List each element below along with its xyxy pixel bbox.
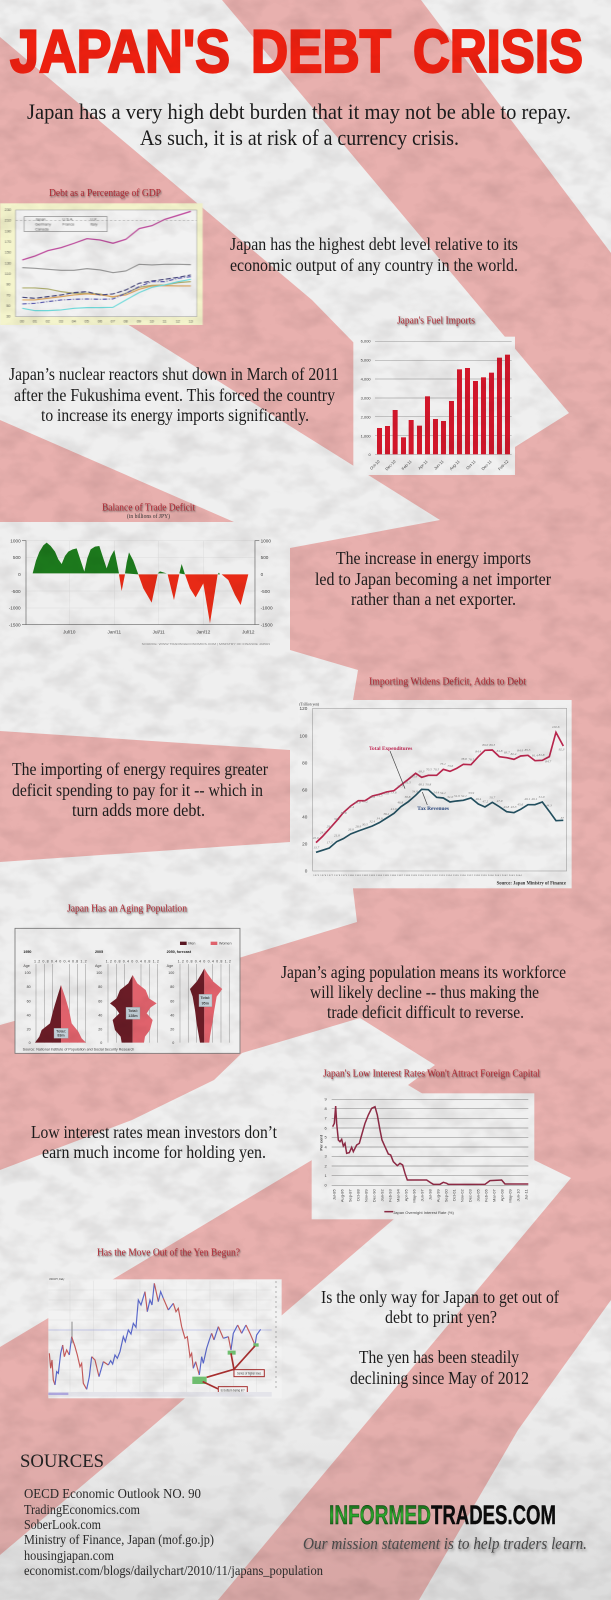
chart: expenditures vs tax revenues: 44.3 bbox=[546, 804, 552, 808]
chart: population pyramids: 1950 bbox=[23, 950, 31, 954]
chart: expenditures vs tax revenues: 51.0 bbox=[539, 795, 545, 799]
chart: balance of trade: SOURCE: WWW.TRADINGECONOMICS.COM | MINISTRY OF FINANCE JAPAN bbox=[142, 642, 270, 646]
chart: debt as percentage of GDP bbox=[0, 203, 203, 325]
chart: expenditures vs tax revenues: 1975 1976 1977 1978 1979 1980 1981 1982 1983 1984 1985 1986 1987 1988 1989 1990 1991 1992 1993 1994 1995 1996 1997 1998 1999 2000 2001 2002 2003 2004 bbox=[313, 875, 523, 877]
chart: interest rate line: Nov-02 bbox=[459, 1189, 464, 1202]
chart: expenditures vs tax revenues: 46.9 bbox=[355, 800, 361, 804]
chart: expenditures vs tax revenues: 40 bbox=[302, 815, 308, 820]
chart: expenditures vs tax revenues: 29.1 bbox=[327, 824, 333, 828]
text: nuclear reactors: Japan’s nuclear reactors shut down in March of 2011 bbox=[9, 364, 339, 384]
chart: expenditures vs tax revenues: 43.4 bbox=[348, 805, 354, 809]
chart: fuel imports bars: 2,000 bbox=[361, 414, 371, 419]
heading: fuel imports: Japan's Fuel Imports bbox=[397, 316, 475, 326]
chart: expenditures vs tax revenues: 84.4 bbox=[475, 749, 481, 753]
chart: population pyramids: 1.2 0.8 0.4 0 0.4 0.8 1.2 bbox=[106, 959, 159, 963]
text: print yen question: Is the only way for Japan to get out of bbox=[321, 1287, 559, 1307]
title bbox=[10, 18, 583, 85]
chart: population pyramids: 80 bbox=[170, 985, 174, 989]
chart: expenditures vs tax revenues: 50.8 bbox=[405, 795, 411, 799]
chart: population pyramids: 1.2 0.8 0.4 0 0.4 0.8 1.2 bbox=[178, 959, 231, 963]
sources list: TradingEconomics.com bbox=[24, 1502, 140, 1517]
heading: importing widens deficit: Importing Widens Deficit, Adds to Debt bbox=[369, 676, 526, 688]
intro text: As such, it is at risk of a currency crisis. bbox=[140, 125, 459, 150]
chart: expenditures vs tax revenues: 51.9 bbox=[454, 794, 460, 798]
chart: interest rate line: Jun-97 bbox=[419, 1189, 424, 1202]
chart: population pyramids: Total: bbox=[56, 1029, 66, 1033]
chart: balance of trade bbox=[9, 538, 273, 646]
chart: debt as percentage of GDP: 00 bbox=[20, 320, 24, 323]
chart: expenditures vs tax revenues: 20 bbox=[302, 842, 308, 847]
heading: debt as percentage of GDP: Debt as a Percentage of GDP bbox=[49, 188, 161, 199]
chart: expenditures vs tax revenues: 47.2 bbox=[482, 800, 488, 804]
chart: debt as percentage of GDP: 210 bbox=[5, 219, 11, 223]
chart: population pyramids: Age bbox=[95, 964, 102, 968]
chart: expenditures vs tax revenues: 47.9 bbox=[497, 799, 503, 803]
text: highest debt level: economic output of any country in the world. bbox=[230, 255, 518, 275]
chart: balance of trade: -1500 bbox=[9, 622, 21, 627]
chart: population pyramids: 60 bbox=[98, 999, 102, 1003]
logo: informedtrades.com bbox=[329, 1500, 556, 1530]
chart: expenditures vs tax revenues: 70.5 bbox=[426, 768, 432, 772]
text: nuclear reactors: after the Fukushima event. This forced the country bbox=[14, 385, 335, 405]
chart: expenditures vs tax revenues: 54.4 bbox=[433, 790, 439, 794]
tagline: Our mission statement is to help traders learn. bbox=[303, 1534, 587, 1553]
chart: yen price chart: Is bottom being in? bbox=[221, 1388, 245, 1392]
chart: population pyramids: 0 bbox=[100, 1041, 102, 1045]
chart: population pyramids: 100 bbox=[25, 971, 31, 975]
chart: expenditures vs tax revenues: 49.1 bbox=[524, 797, 530, 801]
heading: low interest rates: Japan's Low Interest Rates Won't Attract Foreign Capital bbox=[323, 1068, 540, 1080]
chart: interest rate line: May-96 bbox=[411, 1189, 416, 1203]
chart: balance of trade: 1000 bbox=[10, 538, 21, 543]
chart: expenditures vs tax revenues: 47.2 bbox=[362, 799, 368, 803]
chart: interest rate line: 6 bbox=[324, 1125, 327, 1130]
text: print yen question: debt to print yen? bbox=[385, 1307, 497, 1327]
chart: expenditures vs tax revenues: 92.3 bbox=[559, 748, 565, 752]
chart: balance of trade: -500 bbox=[261, 589, 270, 594]
chart: expenditures vs tax revenues: 70.5 bbox=[433, 768, 439, 772]
chart: population pyramids: 2005 bbox=[95, 950, 103, 954]
chart: population pyramids: 0 bbox=[29, 1041, 31, 1045]
chart: yen price chart: USDJPY, Daily bbox=[49, 1279, 65, 1281]
chart: interest rate line: 5 bbox=[324, 1135, 327, 1140]
text: increase in energy imports: led to Japan becoming a net importer bbox=[315, 569, 551, 589]
chart: interest rate line: 3 bbox=[324, 1154, 327, 1159]
chart: population pyramids: 40 bbox=[170, 1013, 174, 1017]
chart: population pyramids: Men bbox=[188, 942, 195, 946]
chart: expenditures vs tax revenues: 89.3 bbox=[489, 743, 495, 747]
chart: fuel imports bars: Oct-11 bbox=[465, 458, 477, 471]
sources list: housingjapan.com bbox=[24, 1548, 114, 1563]
chart: debt as percentage of GDP: 02 bbox=[46, 320, 50, 323]
text: increase in energy imports: rather than a net exporter. bbox=[351, 589, 516, 609]
chart: debt as percentage of GDP: 12 bbox=[176, 320, 180, 323]
chart: population pyramids: Age bbox=[167, 964, 173, 968]
chart: debt as percentage of GDP: 01 bbox=[33, 320, 37, 323]
sources list bbox=[24, 1486, 323, 1578]
chart: debt as percentage of GDP: 30 bbox=[6, 315, 11, 318]
chart: expenditures vs tax revenues: 43.3 bbox=[511, 805, 517, 809]
chart: interest rate line: May-09 bbox=[507, 1189, 512, 1203]
chart: expenditures vs tax revenues: 28.9 bbox=[355, 824, 361, 828]
chart: debt as percentage of GDP: 03 bbox=[59, 320, 63, 323]
chart: balance of trade: 500 bbox=[261, 555, 269, 560]
chart: debt as percentage of GDP: 06 bbox=[98, 320, 102, 323]
text: aging population: Japan’s aging population means its workforce bbox=[281, 962, 566, 982]
title: JAPAN'S bbox=[10, 18, 230, 85]
sources list: Ministry of Finance, Japan (mof.go.jp) bbox=[24, 1532, 214, 1547]
chart: population pyramids: 100 bbox=[168, 971, 174, 975]
heading: move out of the yen: Has the Move Out of the Yen Begun? bbox=[97, 1248, 240, 1258]
chart: debt as percentage of GDP: U.S.A. bbox=[62, 218, 74, 221]
chart: interest rate line: Jul-85 bbox=[331, 1189, 336, 1200]
text: nuclear reactors: to increase its energy imports significantly. bbox=[41, 405, 309, 425]
chart: expenditures vs tax revenues: 50.6 bbox=[369, 795, 375, 799]
chart: fuel imports bars: Oct-10 bbox=[369, 458, 381, 471]
chart: fuel imports bars: 4,000 bbox=[361, 377, 371, 382]
chart: interest rate line: Sep-00 bbox=[443, 1189, 448, 1202]
chart: debt as percentage of GDP: 230 bbox=[5, 208, 11, 212]
text: print yen question: The yen has been steadily bbox=[359, 1347, 519, 1367]
chart: fuel imports bars: 1,000 bbox=[361, 433, 371, 438]
chart: expenditures vs tax revenues: 85.5 bbox=[525, 748, 531, 752]
chart: expenditures vs tax revenues: 54.9 bbox=[412, 790, 418, 794]
chart: expenditures vs tax revenues: 54.1 bbox=[440, 791, 446, 795]
chart: expenditures vs tax revenues: 45.6 bbox=[517, 803, 523, 807]
chart: debt as percentage of GDP: Italy bbox=[90, 223, 98, 226]
chart: balance of trade: -1000 bbox=[261, 606, 273, 611]
chart: interest rate line: Apr-08 bbox=[499, 1189, 504, 1201]
title: CRISIS bbox=[413, 18, 583, 85]
chart: debt as percentage of GDP: 09 bbox=[137, 320, 141, 323]
chart: expenditures vs tax revenues: 17.3 bbox=[327, 840, 333, 844]
chart: interest rate line: Dec-90 bbox=[371, 1189, 376, 1202]
heading: balance of trade deficit: Balance of Trade Deficit bbox=[102, 502, 195, 514]
heading: balance of trade deficit bbox=[102, 502, 195, 520]
chart: interest rate line: 0 bbox=[324, 1183, 327, 1188]
chart: expenditures vs tax revenues: 49.1 bbox=[531, 797, 537, 801]
chart: interest rate line: Aug-86 bbox=[339, 1189, 344, 1202]
chart: interest rate line: Aug-99 bbox=[435, 1189, 440, 1202]
chart: expenditures vs tax revenues: 30.5 bbox=[362, 822, 368, 826]
chart: interest rate line: 2 bbox=[324, 1163, 327, 1168]
chart: population pyramids: 20 bbox=[170, 1027, 174, 1031]
chart: interest rate line: Jan-92 bbox=[379, 1189, 384, 1202]
chart: balance of trade: 1000 bbox=[261, 538, 271, 543]
sources heading: SOURCES bbox=[20, 1451, 104, 1472]
chart: population pyramids: Total: bbox=[128, 1009, 138, 1013]
chart: expenditures vs tax revenues: 81.4 bbox=[532, 754, 538, 758]
chart: balance of trade: -1000 bbox=[9, 606, 21, 611]
chart: expenditures vs tax revenues: 60 bbox=[302, 788, 308, 793]
heading: aging population: Japan Has an Aging Population bbox=[67, 904, 188, 914]
logo: informedtrades.com: INFORMED bbox=[329, 1500, 431, 1530]
chart: expenditures vs tax revenues: 100 bbox=[300, 733, 308, 738]
chart: debt as percentage of GDP: 08 bbox=[124, 320, 128, 323]
chart: population pyramids: Women bbox=[219, 942, 232, 946]
sources list: OECD Economic Outlook NO. 90 bbox=[24, 1486, 201, 1501]
chart: expenditures vs tax revenues: Source: Japan Ministry of Finance bbox=[497, 882, 567, 887]
chart: expenditures vs tax revenues: 26.9 bbox=[348, 828, 354, 832]
chart: expenditures vs tax revenues: 84.9 bbox=[517, 748, 523, 752]
chart: population pyramids: 0 bbox=[172, 1041, 174, 1045]
chart: balance of trade: -500 bbox=[11, 589, 21, 594]
text: importing energy: deficit spending to pay for it -- which in bbox=[12, 780, 263, 800]
chart: population pyramids: Source: National Institute of Population and Social Security Research bbox=[23, 1048, 134, 1052]
chart: population pyramids: 40 bbox=[98, 1013, 102, 1017]
chart: expenditures vs tax revenues: (Trillion yen) bbox=[299, 703, 320, 707]
chart: fuel imports bars: Dec-10 bbox=[384, 458, 397, 471]
chart: population pyramids: 128m bbox=[128, 1014, 138, 1018]
chart: expenditures vs tax revenues: 34.9 bbox=[377, 816, 383, 820]
chart: interest rate line: Japan Overnight Interest Rate (%) bbox=[393, 1210, 454, 1215]
chart: expenditures vs tax revenues: 78.5 bbox=[468, 757, 474, 761]
chart: expenditures vs tax revenues: 43.8 bbox=[503, 805, 509, 809]
chart: expenditures vs tax revenues: 46.8 bbox=[397, 800, 403, 804]
chart: fuel imports bars: Feb-11 bbox=[400, 458, 413, 471]
logo: informedtrades.com: TRADES.COM bbox=[431, 1500, 556, 1530]
text: importing energy: The importing of energy requires greater bbox=[12, 759, 268, 779]
chart: fuel imports bars: 3,000 bbox=[361, 396, 371, 401]
text: highest debt level bbox=[230, 234, 518, 275]
chart: fuel imports bars: Dec-11 bbox=[480, 458, 493, 471]
chart: expenditures vs tax revenues: 51.0 bbox=[447, 795, 453, 799]
chart: expenditures vs tax revenues: Tax Revenues bbox=[417, 807, 449, 812]
chart: fuel imports bars: Apr-11 bbox=[417, 458, 429, 471]
chart: interest rate line: Mar-07 bbox=[491, 1189, 496, 1202]
chart: population pyramids: 95m bbox=[202, 1001, 210, 1005]
chart: balance of trade: 0 bbox=[261, 572, 264, 577]
chart: interest rate line: Jul-11 bbox=[523, 1189, 528, 1200]
chart: interest rate line: Mar-94 bbox=[395, 1189, 400, 1202]
chart: interest rate line: Jul-98 bbox=[427, 1189, 432, 1200]
chart: interest rate line: Feb-93 bbox=[387, 1189, 392, 1202]
chart: population pyramids: 80 bbox=[98, 985, 102, 989]
chart: expenditures vs tax revenues: 13.7 bbox=[313, 846, 319, 850]
intro text: Japan has a very high debt burden that it may not be able to repay. bbox=[27, 99, 571, 124]
chart: debt as percentage of GDP: Japan bbox=[35, 218, 46, 221]
intro text bbox=[27, 99, 571, 150]
text: increase in energy imports: The increase in energy imports bbox=[336, 548, 531, 568]
text: increase in energy imports bbox=[315, 548, 551, 609]
chart: population pyramids: 40 bbox=[27, 1013, 31, 1017]
chart: population pyramids: 60 bbox=[27, 999, 31, 1003]
text: low interest rates: Low interest rates mean investors don’t bbox=[31, 1122, 277, 1142]
chart: population pyramids: 1.2 0.8 0.4 0 0.4 0.8 1.2 bbox=[34, 959, 87, 963]
chart: balance of trade: 0 bbox=[18, 572, 21, 577]
chart: interest rate line: Jun-10 bbox=[515, 1189, 520, 1202]
chart: debt as percentage of GDP: 190 bbox=[5, 230, 11, 233]
chart: expenditures vs tax revenues: 38.8 bbox=[341, 811, 347, 815]
chart: debt as percentage of GDP: 90 bbox=[6, 283, 11, 287]
chart: interest rate line: 9 bbox=[324, 1097, 327, 1102]
chart: expenditures vs tax revenues: 53.6 bbox=[391, 790, 397, 794]
chart: expenditures vs tax revenues: 60.1 bbox=[419, 783, 425, 787]
chart: expenditures vs tax revenues: 61.5 bbox=[405, 780, 411, 784]
chart: yen price chart: Series of higher lows bbox=[237, 1371, 261, 1375]
chart: expenditures vs tax revenues: 78.8 bbox=[461, 757, 467, 761]
text: low interest rates bbox=[31, 1122, 277, 1162]
chart: expenditures vs tax revenues: 102.6 bbox=[552, 725, 560, 729]
text: low interest rates: earn much income for holding yen. bbox=[42, 1142, 266, 1162]
chart: debt as percentage of GDP: 11 bbox=[163, 320, 167, 323]
chart: population pyramids: 80 bbox=[27, 985, 31, 989]
chart: expenditures vs tax revenues: 81.8 bbox=[539, 753, 545, 757]
chart: expenditures vs tax revenues: 49.4 bbox=[475, 797, 481, 801]
chart: expenditures vs tax revenues bbox=[298, 700, 572, 888]
chart: expenditures vs tax revenues: Total Expenditures bbox=[369, 747, 412, 752]
text: importing energy: turn adds more debt. bbox=[72, 800, 205, 820]
chart: balance of trade: -1500 bbox=[261, 622, 273, 627]
chart: expenditures vs tax revenues: 51.5 bbox=[377, 794, 383, 798]
chart: expenditures vs tax revenues: 75.1 bbox=[440, 762, 446, 766]
chart: fuel imports bars: Jun-11 bbox=[433, 458, 445, 471]
chart: fuel imports bars: 0 bbox=[368, 452, 371, 457]
chart: balance of trade: 500 bbox=[13, 555, 21, 560]
heading: balance of trade deficit: (in billions of JPY) bbox=[127, 513, 170, 520]
text: aging population: will likely decline -- thus making the bbox=[310, 982, 539, 1002]
chart: population pyramids: Total: bbox=[200, 996, 210, 1000]
chart: expenditures vs tax revenues: 80 bbox=[302, 760, 308, 765]
chart: expenditures vs tax revenues: 41.9 bbox=[391, 807, 397, 811]
text: highest debt level: Japan has the highest debt level relative to its bbox=[230, 234, 518, 254]
text: nuclear reactors bbox=[9, 364, 339, 425]
chart: population pyramids bbox=[15, 928, 240, 1053]
chart: population pyramids: 20 bbox=[27, 1027, 31, 1031]
chart: interest rate line: Jan-05 bbox=[475, 1189, 480, 1202]
chart: expenditures vs tax revenues: 52.1 bbox=[461, 794, 467, 798]
chart: population pyramids: 83m bbox=[57, 1034, 65, 1038]
chart: expenditures vs tax revenues: 57.7 bbox=[397, 784, 403, 788]
chart: expenditures vs tax revenues: 21.9 bbox=[334, 834, 340, 838]
chart: expenditures vs tax revenues: 37 bbox=[561, 816, 564, 820]
chart: expenditures vs tax revenues: 24.5 bbox=[320, 830, 326, 834]
text: importing energy bbox=[12, 759, 268, 820]
chart: interest rate line: Sep-87 bbox=[347, 1189, 352, 1202]
chart: expenditures vs tax revenues: 38.2 bbox=[383, 812, 389, 816]
chart: expenditures vs tax revenues: 50.7 bbox=[489, 795, 495, 799]
chart: population pyramids: 2050, forecast bbox=[167, 950, 192, 954]
chart: expenditures vs tax revenues: 32.4 bbox=[369, 820, 375, 824]
chart: interest rate line: Per cent bbox=[318, 1134, 323, 1151]
chart: population pyramids: 60 bbox=[170, 999, 174, 1003]
chart: interest rate line: Feb-06 bbox=[483, 1189, 488, 1202]
sources list: economist.com/blogs/dailychart/2010/11/japans_population bbox=[24, 1563, 323, 1578]
chart: balance of trade: Jan/11 bbox=[108, 629, 122, 634]
chart: debt as percentage of GDP: Canada bbox=[35, 228, 49, 231]
chart: debt as percentage of GDP: 50 bbox=[6, 304, 11, 308]
chart: expenditures vs tax revenues: 120 bbox=[300, 706, 308, 711]
chart: debt as percentage of GDP: 70 bbox=[6, 294, 11, 297]
chart: expenditures vs tax revenues: 53.9 bbox=[468, 791, 474, 795]
chart: fuel imports bars bbox=[353, 337, 515, 475]
text: print yen question bbox=[321, 1287, 559, 1388]
chart: population pyramids: 20 bbox=[98, 1027, 102, 1031]
sources list: SoberLook.com bbox=[24, 1517, 101, 1532]
chart: expenditures vs tax revenues: 73.6 bbox=[447, 764, 453, 768]
chart: expenditures vs tax revenues: 59.8 bbox=[425, 783, 431, 787]
chart: debt as percentage of GDP: U.K. bbox=[90, 218, 98, 221]
text: aging population bbox=[281, 962, 566, 1022]
chart: population pyramids: 100 bbox=[96, 971, 102, 975]
chart: interest rate line: Apr-95 bbox=[403, 1189, 408, 1201]
chart: debt as percentage of GDP: Germany bbox=[35, 223, 51, 226]
chart: interest rate line bbox=[312, 1093, 534, 1219]
chart: expenditures vs tax revenues: 89.0 bbox=[482, 743, 488, 747]
text: print yen question: declining since May of 2012 bbox=[350, 1368, 529, 1388]
chart: expenditures vs tax revenues: 0 bbox=[305, 869, 308, 874]
chart: debt as percentage of GDP: France bbox=[62, 223, 74, 226]
chart: expenditures vs tax revenues: 65.9 bbox=[411, 774, 417, 778]
chart: interest rate line: 1 bbox=[324, 1173, 327, 1178]
chart: balance of trade: Jul/11 bbox=[153, 629, 165, 634]
chart: expenditures vs tax revenues: 84.8 bbox=[497, 749, 503, 753]
chart: debt as percentage of GDP: 13 bbox=[189, 320, 193, 323]
text: aging population: trade deficit difficult to reverse. bbox=[327, 1002, 524, 1022]
chart: debt as percentage of GDP: 150 bbox=[5, 251, 11, 255]
chart: debt as percentage of GDP: 07 bbox=[111, 320, 115, 323]
chart: balance of trade: Jul/12 bbox=[242, 629, 255, 634]
chart: fuel imports bars: Feb-12 bbox=[497, 458, 510, 471]
chart: fuel imports bars: 5,000 bbox=[361, 358, 371, 363]
chart: expenditures vs tax revenues: 83.7 bbox=[504, 750, 510, 754]
chart: expenditures vs tax revenues: 53.0 bbox=[383, 792, 389, 796]
chart: interest rate line: Nov-89 bbox=[363, 1189, 368, 1202]
chart: yen price chart bbox=[48, 1279, 282, 1398]
chart: interest rate line: Oct-01 bbox=[451, 1189, 456, 1201]
chart: population pyramids: Age bbox=[23, 964, 30, 968]
chart: debt as percentage of GDP: 110 bbox=[5, 272, 11, 276]
chart: interest rate line: 4 bbox=[324, 1144, 327, 1149]
chart: debt as percentage of GDP: 170 bbox=[5, 240, 11, 244]
chart: debt as percentage of GDP: 130 bbox=[5, 262, 11, 265]
chart: expenditures vs tax revenues: 34.1 bbox=[334, 817, 340, 821]
chart: interest rate line: 8 bbox=[324, 1106, 327, 1111]
chart: debt as percentage of GDP: 05 bbox=[85, 320, 89, 323]
chart: expenditures vs tax revenues: 69.3 bbox=[419, 770, 425, 774]
chart: balance of trade: Jan/12 bbox=[196, 629, 211, 634]
chart: debt as percentage of GDP: 10 bbox=[150, 320, 154, 323]
chart: interest rate line: Oct-88 bbox=[355, 1189, 360, 1201]
chart: balance of trade: Jul/10 bbox=[63, 629, 76, 634]
chart: expenditures vs tax revenues: 20.9 bbox=[313, 836, 319, 840]
chart: interest rate line: Dec-03 bbox=[467, 1189, 472, 1202]
chart: fuel imports bars: 6,000 bbox=[361, 339, 371, 344]
chart: debt as percentage of GDP: 04 bbox=[72, 320, 76, 323]
chart: expenditures vs tax revenues: 82.4 bbox=[511, 752, 517, 756]
chart: fuel imports bars: Aug-11 bbox=[448, 458, 461, 471]
chart: interest rate line: 7 bbox=[324, 1116, 327, 1121]
title: DEBT bbox=[251, 18, 391, 85]
chart: expenditures vs tax revenues: 84.7 bbox=[545, 759, 551, 763]
